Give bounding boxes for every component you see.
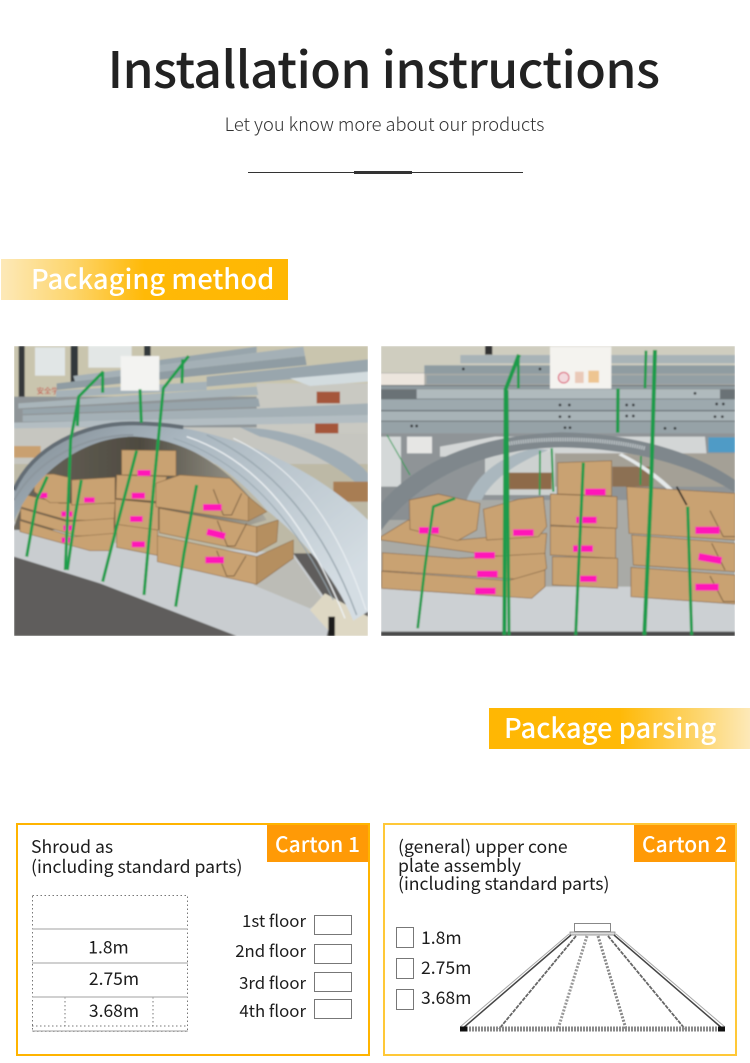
photo: packaged arch panels and cartons, left [14, 346, 368, 636]
ground and bubble wrap [14, 553, 368, 636]
arch [381, 432, 735, 531]
description text: (including standard parts) [398, 871, 609, 896]
diagram: shroud layers: 3.68m [89, 998, 139, 1023]
walls and windows [14, 346, 368, 399]
description text: Shroud as [31, 834, 113, 859]
green straps [387, 350, 692, 635]
steel bars [159, 347, 257, 367]
tab: Carton 2 [634, 825, 735, 862]
photo: packaged arch panels and cartons, right [381, 346, 735, 636]
panel: Carton 2 [383, 823, 737, 1056]
diagram: shroud layers: 2.75m [89, 966, 139, 991]
diagram: cone plate assembly [460, 923, 726, 1032]
description text: plate assembly [398, 852, 521, 878]
panel: Carton 1 [16, 823, 370, 1056]
checklist: lengths [396, 925, 471, 1010]
checklist: floors: 3rd floor [239, 970, 306, 994]
checklist: floors: 1st floor [242, 908, 306, 932]
tab: Carton 2: Carton 2 [642, 829, 727, 859]
tab: Carton 1: Carton 1 [275, 829, 360, 859]
cartons [20, 450, 293, 584]
checklist: lengths: 3.68m [421, 985, 471, 1010]
description text: (including standard parts) [31, 854, 242, 878]
pink labels [38, 470, 226, 563]
safety label [550, 347, 611, 389]
cartons [381, 461, 735, 604]
diagram: shroud layers [32, 895, 188, 1032]
floor [381, 587, 735, 632]
banner: Package parsing: Package parsing [504, 706, 716, 746]
checklist: lengths: 1.8m [421, 925, 462, 950]
pink labels [419, 489, 722, 594]
description text [31, 834, 242, 878]
checklist: lengths: 2.75m [421, 955, 471, 980]
divider with centre accent [248, 171, 523, 174]
subtitle: Let you know more about our products [225, 111, 544, 137]
diagram: shroud layers: 1.8m [88, 934, 129, 960]
tab: Carton 1 [267, 825, 368, 862]
background items [381, 433, 735, 500]
back arch [240, 427, 368, 495]
main arch [14, 423, 368, 621]
title: Installation instructions [108, 31, 659, 103]
checklist: floors: 4th floor [239, 998, 306, 1022]
green straps [27, 356, 197, 607]
photo: packaged arch panels and cartons, left: 安全学 [37, 385, 59, 396]
checklist: floors: 2nd floor [235, 938, 306, 962]
arch interior [14, 435, 267, 530]
description text: (general) upper cone [398, 834, 568, 859]
checklist: floors [235, 908, 352, 1022]
steel bars [460, 355, 735, 363]
description text [398, 834, 609, 896]
banner: Packaging method: Packaging method [31, 257, 274, 297]
